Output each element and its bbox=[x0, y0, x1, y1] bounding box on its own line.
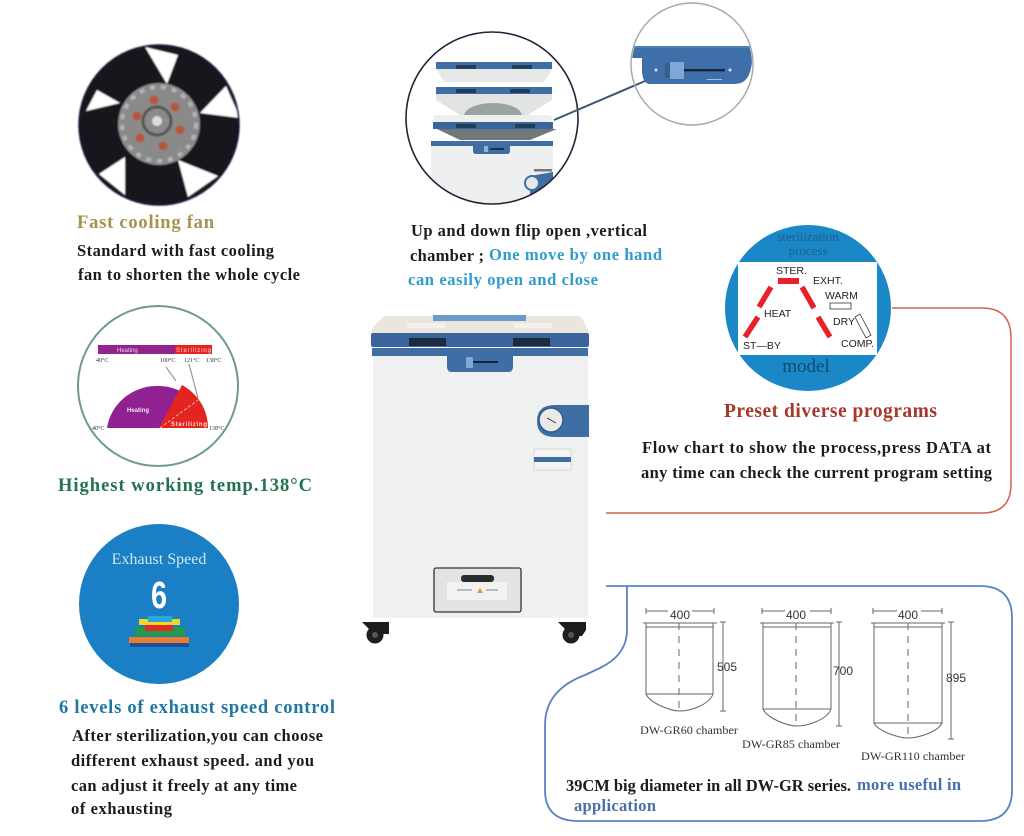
icon: temperature gauge circle: 138°C bbox=[206, 357, 221, 364]
text: preset description: any time can check the current program setting bbox=[641, 463, 993, 482]
red outline bracket bbox=[606, 308, 1011, 513]
autoclave product bbox=[362, 315, 589, 644]
chamber diagram: DW-GR60: 505 bbox=[717, 660, 737, 674]
heading: highest working temp: Highest working temp.138°C bbox=[58, 476, 312, 496]
icon: temperature gauge circle: Heating bbox=[117, 348, 138, 354]
icon: exhaust speed circle: 6 bbox=[151, 575, 167, 617]
text: exhaust description: After sterilization,you can choose bbox=[72, 726, 323, 745]
chamber diagram: DW-GR110: DW-GR110 chamber bbox=[861, 749, 965, 763]
icon: sterilization process display bbox=[725, 225, 891, 391]
panel: preset programs bbox=[606, 225, 1011, 513]
chamber diagram: DW-GR110: 400 bbox=[898, 608, 918, 622]
text: chamber diameter note: application bbox=[574, 796, 656, 815]
text: exhaust description: different exhaust speed. and you bbox=[71, 751, 314, 770]
arrow: leader line to handle detail bbox=[554, 81, 645, 120]
icon: sterilization process display: EXHT. bbox=[813, 275, 843, 287]
chamber diagram: DW-GR85 bbox=[742, 608, 853, 751]
icon: sterilization process display: ST—BY bbox=[743, 340, 781, 352]
text: preset description: Flow chart to show the process,press DATA at bbox=[642, 438, 992, 457]
icon: exhaust speed circle: Exhaust Speed bbox=[112, 551, 206, 568]
chamber diagram: DW-GR85: 700 bbox=[833, 664, 853, 678]
icon: temperature gauge circle bbox=[78, 306, 238, 466]
icon: temperature gauge circle: 138°C bbox=[209, 425, 224, 432]
heading: fast cooling fan: Fast cooling fan bbox=[77, 213, 215, 233]
heading: preset diverse programs: Preset diverse programs bbox=[724, 401, 937, 422]
text: chamber diameter note: more useful in bbox=[857, 775, 961, 794]
pressure gauge bbox=[537, 405, 589, 437]
icon: temperature gauge circle: Heating bbox=[127, 408, 149, 414]
text: fan description: fan to shorten the whole cycle bbox=[78, 265, 300, 284]
caster wheels bbox=[362, 622, 586, 644]
text: exhaust description: of exhausting bbox=[71, 799, 173, 818]
icon: temperature gauge circle: 100°C bbox=[160, 357, 175, 364]
icon: temperature gauge circle: Sterilizing bbox=[176, 348, 211, 354]
blue outline bracket bbox=[545, 586, 1012, 821]
text: chamber diameter note: 39CM big diameter in all DW-GR series. bbox=[566, 776, 851, 795]
text: chamber diameter note bbox=[566, 775, 961, 815]
front handle bbox=[447, 350, 513, 372]
icon: sterilization process display: HEAT bbox=[764, 308, 792, 320]
icon: sterilization process display: process bbox=[788, 243, 828, 258]
cabinet bbox=[373, 356, 588, 618]
icon: sterilization process display: sterilization bbox=[777, 229, 839, 244]
icon: lid flip circle bbox=[406, 32, 578, 211]
chamber diagram: DW-GR60: 400 bbox=[670, 608, 690, 622]
heading: exhaust speed control: 6 levels of exhaust speed control bbox=[59, 698, 335, 718]
icon: sterilization process display: model bbox=[782, 356, 830, 377]
icon: temperature gauge circle: 40°C bbox=[96, 357, 108, 364]
text: flip open description: Up and down flip open ,vertical bbox=[411, 221, 647, 240]
chamber diagram: DW-GR60 bbox=[640, 608, 738, 737]
icon: sterilization process display: WARM bbox=[825, 290, 858, 302]
icon: sterilization process display: STER. bbox=[776, 265, 807, 277]
drawer panel bbox=[434, 568, 521, 612]
icon: sterilization process display: DRY bbox=[833, 316, 855, 328]
rating label bbox=[534, 449, 571, 470]
text: fan description: Standard with fast cooling bbox=[77, 241, 275, 260]
text: flip open description: can easily open and close bbox=[408, 270, 598, 289]
chamber diagram: DW-GR85: DW-GR85 chamber bbox=[742, 737, 840, 751]
icon: temperature gauge circle: 121°C bbox=[184, 357, 199, 364]
icon: temperature gauge circle: 40°C bbox=[92, 425, 104, 432]
chamber diagram: DW-GR60: DW-GR60 chamber bbox=[640, 723, 738, 737]
icon: temperature gauge circle: Sterilizing bbox=[171, 422, 207, 428]
text: flip open description bbox=[408, 221, 662, 289]
icon: exhaust speed circle bbox=[79, 524, 239, 684]
icon: cooling fan bbox=[79, 45, 240, 205]
chamber diagram: DW-GR110: 895 bbox=[946, 671, 966, 685]
text: flip open description: One move by one hand bbox=[489, 245, 662, 264]
panel: chamber sizes bbox=[545, 586, 1012, 821]
lid top bbox=[371, 316, 589, 333]
chamber diagram: DW-GR85: 400 bbox=[786, 608, 806, 622]
text: flip open description: chamber ; bbox=[410, 246, 484, 265]
icon: handle detail circle bbox=[630, 3, 754, 125]
icon: sterilization process display: COMP. bbox=[841, 338, 874, 350]
chamber diagram: DW-GR110 bbox=[861, 608, 966, 763]
text: exhaust description: can adjust it freely at any time bbox=[71, 776, 297, 795]
